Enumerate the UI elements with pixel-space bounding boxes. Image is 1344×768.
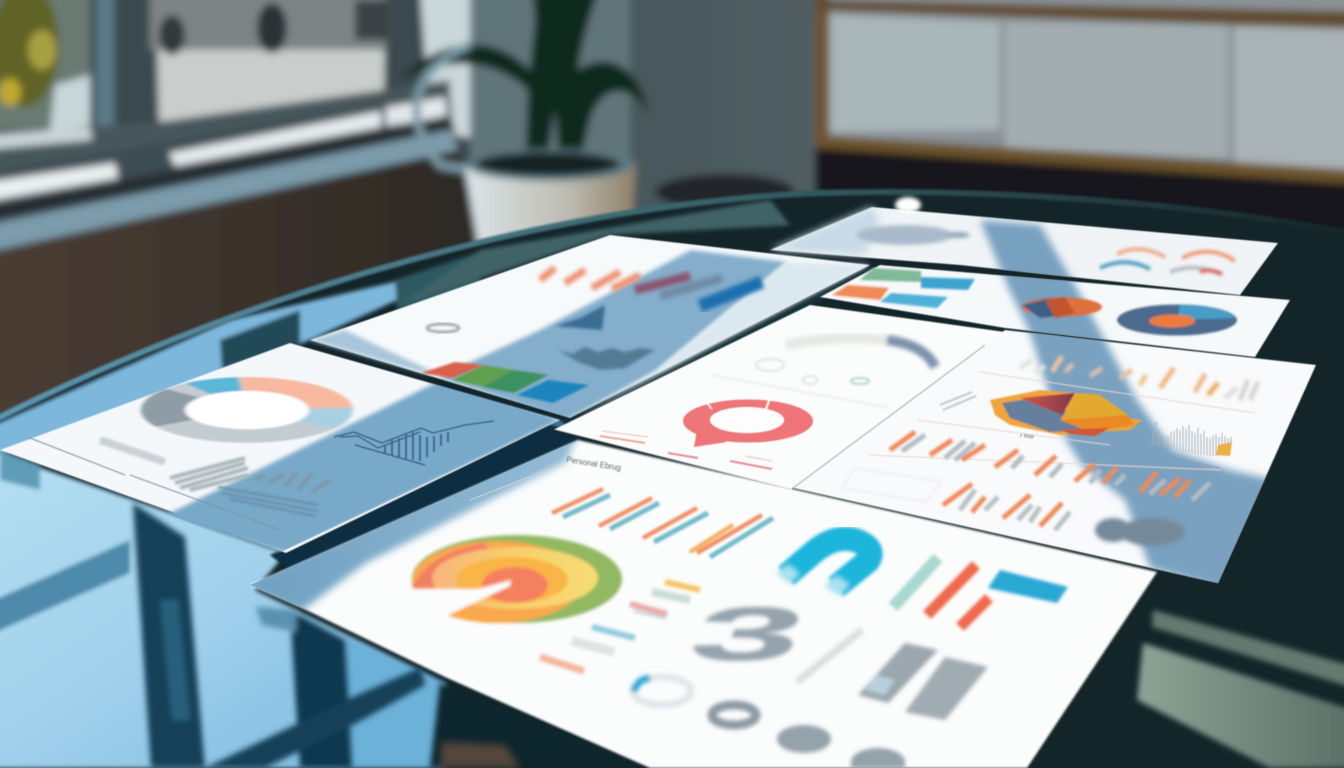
panel: upper right paper [820, 265, 1290, 357]
glass reflection upper left [0, 200, 790, 470]
pink labels [600, 431, 772, 469]
grey bars [858, 643, 988, 720]
blurred grey chart [857, 225, 970, 245]
paper sheets [0, 207, 1316, 590]
arc charts [1100, 249, 1235, 275]
vertical bars and blue block [893, 558, 1068, 627]
diagonal shadow band [980, 220, 1275, 590]
large pie chart [1117, 304, 1237, 336]
coral bar chart [540, 268, 640, 289]
ruled lines [870, 372, 1255, 470]
ruled lines [30, 438, 280, 530]
panel: top right paper [770, 207, 1278, 295]
pie chart [990, 390, 1142, 436]
spiky area chart [558, 347, 655, 370]
rainbow donut chart [392, 535, 622, 623]
panel: front paper [240, 432, 1157, 768]
blue arch [776, 539, 871, 596]
red ring chart [683, 398, 813, 447]
row 1 bars [890, 432, 1210, 500]
colour blocks [832, 268, 975, 308]
coloured tiles [421, 362, 589, 403]
legend bars [540, 582, 700, 671]
panel: left paper [0, 343, 560, 553]
glare spot [895, 197, 921, 213]
donut chart [130, 374, 364, 446]
grey long bar [797, 630, 862, 682]
ring icon [633, 677, 691, 705]
grey circle icons [712, 705, 905, 768]
slanted bar pairs [552, 489, 773, 557]
glass table [0, 192, 1344, 768]
grey blob chart [1095, 518, 1185, 546]
floor patch [440, 742, 520, 768]
garbled caption: r Inor [1020, 433, 1034, 440]
panel: large bar chart paper [793, 330, 1316, 583]
plant [400, 0, 650, 170]
table legs [133, 503, 650, 768]
small pie chart [1022, 297, 1102, 318]
dark wall corner [655, 174, 795, 210]
radiator [0, 130, 480, 430]
window frame [0, 0, 480, 230]
plant pot [465, 149, 636, 255]
row 2 bars [943, 484, 1070, 530]
spike chart [1150, 422, 1232, 456]
faint box [842, 468, 942, 502]
paper title: Personal Ebrug [566, 455, 622, 473]
glass reflection lower left [0, 440, 446, 768]
panel: red ring paper [553, 305, 1005, 490]
line chart [334, 421, 494, 465]
dark triangle chart [555, 305, 605, 330]
top small bar chart [1020, 356, 1258, 400]
small grey text lines [940, 392, 976, 410]
shelf [815, 0, 1344, 250]
right dark reflections [1137, 610, 1344, 768]
blue bar chart [635, 276, 762, 306]
paper shadow strip [270, 268, 880, 575]
big grey numeral: 3 [678, 591, 819, 676]
faint small icons [712, 359, 890, 408]
grey bar clusters [100, 440, 330, 516]
small ring [427, 324, 459, 332]
panel: center paper [310, 235, 870, 418]
top ring chart [786, 338, 935, 367]
